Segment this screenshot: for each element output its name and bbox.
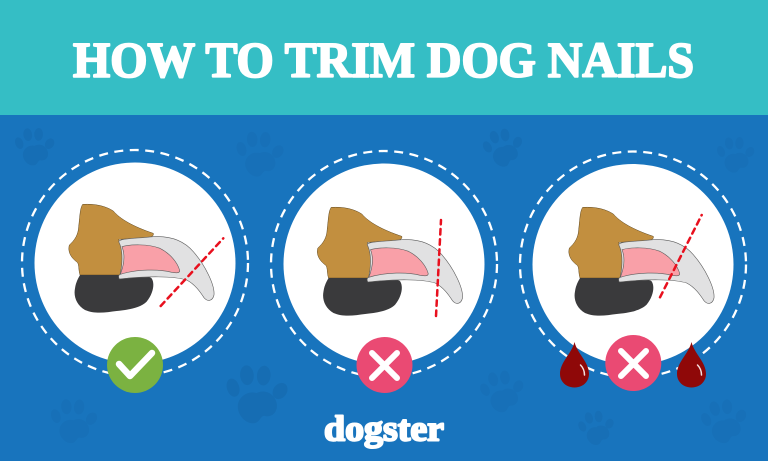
cut line: through the quick [660,215,702,297]
header band [0,0,768,115]
icon: red cross [356,337,412,393]
panel: too short trim [271,151,497,393]
panel: correct trim [22,150,248,393]
illustration: dog nail [69,204,214,313]
icon: blood drop right [677,342,706,388]
cut line: beyond the quick [161,238,223,306]
icon: blood drop left [560,342,589,388]
illustration: dog nail [317,207,463,316]
cut line: vertical through nail [436,220,441,316]
illustration: dog nail [569,207,714,316]
title: HOW TO TRIM DOG NAILS [73,32,694,88]
background paw prints [12,123,759,449]
logo: dogster: dogster [324,408,444,448]
panel: cut into the quick [520,152,746,391]
icon: red cross [605,335,661,391]
icon: green check [107,337,163,393]
